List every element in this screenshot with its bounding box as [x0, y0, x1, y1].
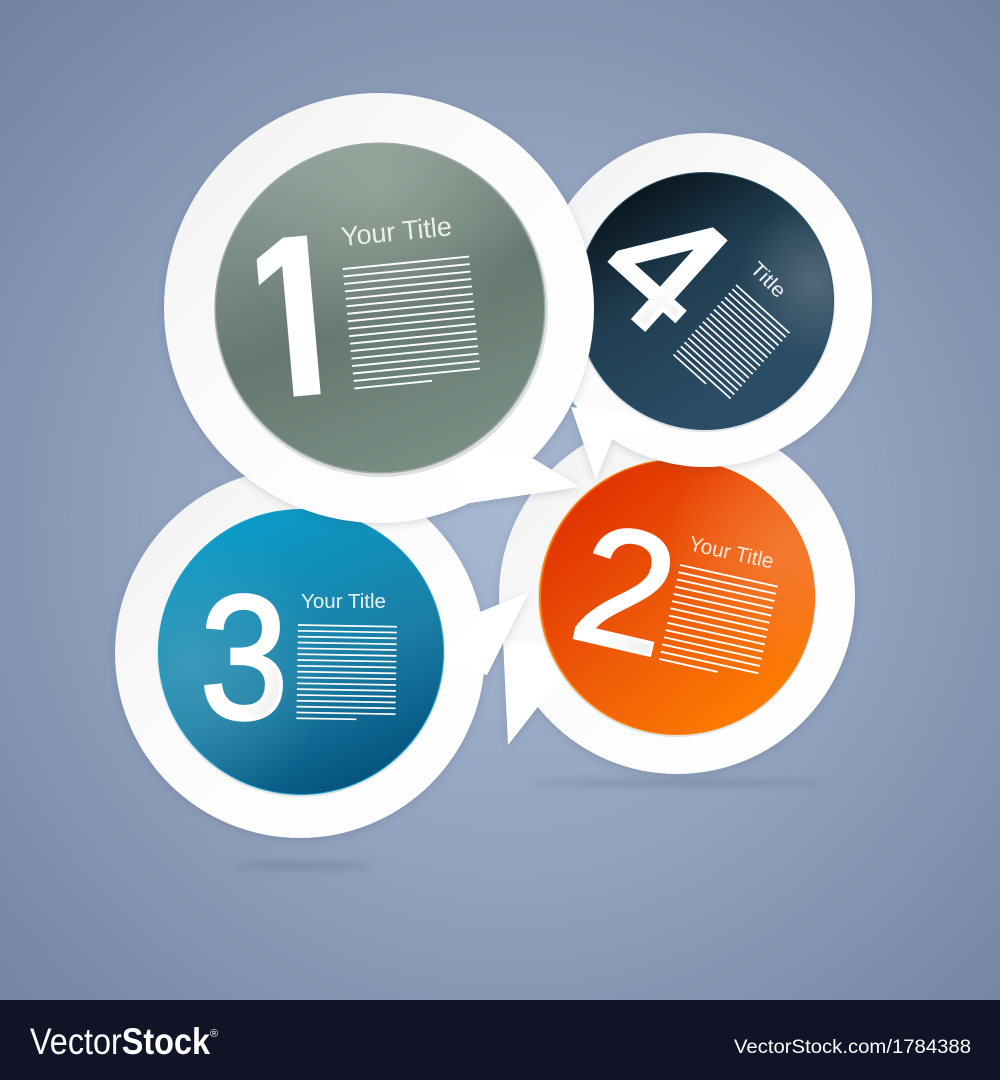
title 1: Your Title: [340, 211, 453, 252]
footer bar: [0, 1000, 1000, 1080]
white ring with pointer 2: [499, 418, 855, 774]
floor shadow under circle 2: [530, 780, 830, 786]
text lines 2: [659, 565, 778, 681]
image id: VectorStock.com/1784388: [734, 1036, 971, 1058]
title 2: Your Title: [687, 532, 776, 573]
panel: step 2 orange circle: [499, 418, 855, 774]
panel: step 3 blue circle: [115, 468, 529, 838]
title 4: Title: [745, 258, 790, 303]
white ring with pointer 1: [164, 93, 594, 523]
text lines 1: [343, 257, 481, 388]
orange disc: [538, 459, 816, 737]
dark disc: [575, 172, 835, 432]
title 3: Your Title: [301, 591, 386, 613]
text lines 4: [673, 285, 790, 403]
number 4: 4: [565, 164, 765, 371]
number 1: 1: [211, 176, 382, 481]
number 2: 2: [558, 487, 693, 693]
white ring with pointer 4: [538, 133, 872, 480]
floor shadow under circle 3: [233, 864, 373, 868]
blue disc: [157, 509, 445, 797]
text lines 3: [296, 625, 397, 720]
panel: step 1 grey circle: [164, 93, 594, 523]
VectorStock logo: VectorStock: [30, 1021, 210, 1062]
grey disc: [214, 142, 548, 477]
white ring with pointer 3: [115, 468, 529, 838]
number 3: 3: [200, 559, 288, 756]
registered mark: ®: [210, 1028, 218, 1040]
panel: step 4 dark circle: [538, 133, 872, 480]
